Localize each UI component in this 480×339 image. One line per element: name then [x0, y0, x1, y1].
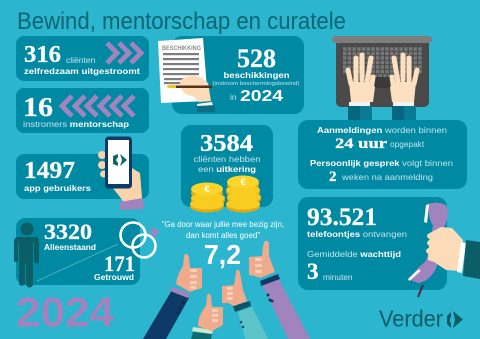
panel: aanmeldingen — [298, 120, 467, 189]
number: 3584: 3584 — [200, 131, 253, 157]
number: 1497: 1497 — [24, 158, 75, 184]
label: zelfredzaam uitgestroomt: zelfredzaam uitgestroomt — [24, 66, 140, 76]
icon: euro coin stacks: € — [240, 177, 246, 187]
icon: document with signing hand: BESCHIKKING — [162, 45, 201, 52]
text: gemiddelde wachttijd: Gemiddelde wachttijd — [307, 249, 401, 259]
sleeve: purple — [262, 278, 310, 339]
icon: thumbs up hands — [143, 241, 310, 339]
logo: Verder: Verder — [379, 306, 443, 332]
number: 93.521: 93.521 — [307, 204, 377, 231]
number: 3 minuten: 3 — [307, 259, 318, 284]
icon: rings — [120, 222, 158, 258]
text: persoonlijk gesprek: Persoonlijk gesprek volgt binnen — [310, 158, 453, 168]
panel: uitkering — [181, 125, 273, 207]
quote: “Ga door waar jullie mee bezig zijn, — [162, 220, 284, 229]
panel: alleenstaand en getrouwd — [14, 218, 158, 288]
icon: euro coin stacks — [190, 176, 261, 212]
icon: person — [14, 222, 39, 288]
label: clienten hebben een uitkering: cliënten hebben — [194, 154, 261, 164]
icon: hand with telephone — [408, 203, 480, 297]
panel: beschikkingen — [172, 36, 304, 114]
text: telefoontjes ontvangen: telefoontjes ontvangen — [307, 229, 407, 239]
panel: aanmeldingen: weken na aanmelding — [341, 172, 433, 182]
panel: beschikkingen: 2024 — [240, 88, 283, 105]
icon: document with signing hand — [158, 38, 215, 112]
label: instromers mentorschap: instromers mentorschap — [23, 119, 129, 129]
hand: right — [249, 241, 275, 278]
hand: left on keyboard — [348, 55, 375, 102]
arrows: right chevrons — [107, 43, 141, 63]
panel: uitkering: een uitkering — [198, 164, 256, 174]
quote: dan komt alles goed” — [186, 231, 260, 240]
sleeve: teal — [238, 307, 268, 339]
sleeve: navy — [143, 290, 189, 339]
label: getrouwd: Getrouwd — [94, 273, 134, 282]
panel: instromers mentorschap — [16, 88, 149, 133]
label: alleenstaand: Alleenstaand — [44, 243, 96, 252]
score: 7,2: 7,2 — [204, 239, 241, 270]
sleeve: dark green — [191, 332, 212, 339]
label: app gebruikers: app gebruikers — [24, 183, 91, 193]
panel: telefoontjes — [298, 197, 447, 290]
panel: telefoontjes: minuten — [323, 272, 353, 282]
title: Bewind, mentorschap en curatele — [17, 8, 346, 35]
hand: right on keyboard — [390, 55, 417, 102]
icon: euro coin stacks: € — [204, 184, 210, 194]
hand: middle — [222, 270, 247, 306]
label: in 2024: in — [230, 92, 237, 102]
arrows: left chevrons — [62, 96, 134, 116]
quote — [162, 220, 284, 240]
icon: hands on laptop — [332, 36, 432, 120]
panel: zelfredzaam uitgestroomt — [16, 36, 149, 81]
number: 3320: 3320 — [44, 219, 92, 244]
text: 2 weken na aanmelding: 2 — [329, 169, 336, 185]
number: 16: 16 — [23, 92, 53, 122]
label: clienten: cliënten — [66, 55, 96, 65]
hand: bottom — [198, 294, 223, 331]
panel: app gebruikers — [16, 154, 149, 199]
text: aanmeldingen: Aanmeldingen worden binnen — [317, 125, 447, 135]
number: 528: 528 — [237, 44, 276, 73]
label: beschikkingen: beschikkingen — [224, 70, 290, 80]
icon: hand with phone — [98, 136, 144, 210]
hand: left — [176, 254, 202, 292]
number: 316: 316 — [24, 42, 61, 68]
number: 171: 171 — [104, 251, 135, 276]
year: 2024: 2024 — [16, 288, 115, 336]
panel: aanmeldingen: opgepakt — [390, 139, 425, 149]
label: instroom beschermingsbewind: (instroom beschermingsbewind) — [212, 81, 300, 87]
text: 24 uur opgepakt: 24 uur — [335, 136, 387, 152]
